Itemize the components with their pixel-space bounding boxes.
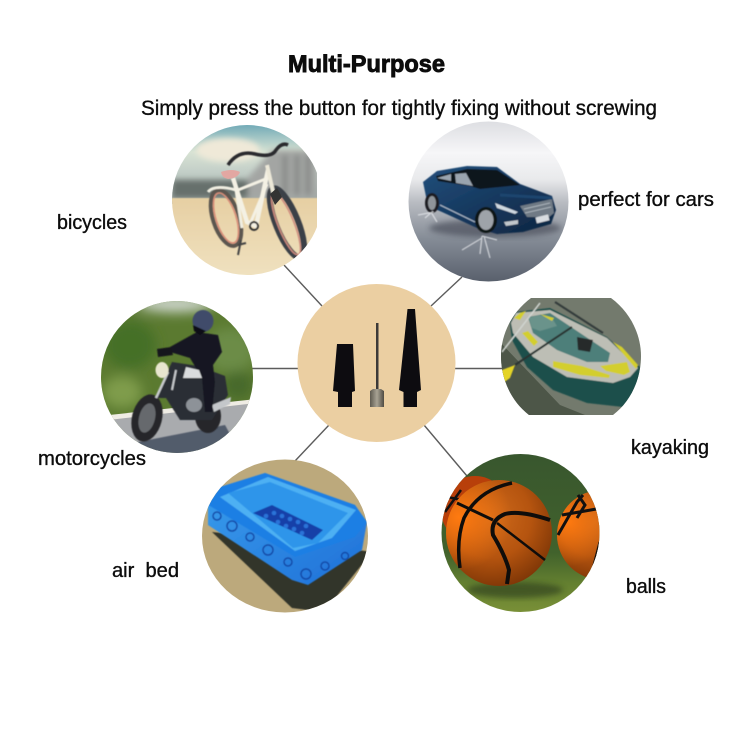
icon: inflation needle [370,323,384,407]
label: motorcycles: motorcycles [38,447,146,470]
label: perfect for cars: perfect for cars [578,188,714,211]
photo: car [405,120,573,284]
photo: inflatable boat [498,295,644,417]
connector lines [250,265,503,476]
subtitle: Simply press the button for tightly fixing without screwing [141,97,657,120]
label: bicycles: bicycles [57,211,127,234]
photo: bicycle [170,124,320,278]
title: Multi-Purpose [288,51,445,78]
label: balls: balls [626,575,666,598]
icon: long nozzle [399,309,421,407]
hub circle [298,284,456,442]
photo: basketballs [442,454,600,612]
label: kayaking: kayaking [631,436,709,459]
label: air bed: air bed [112,559,179,582]
photo: motorcycle [98,296,256,458]
central hub: nozzle adapters [298,284,456,442]
photo: inflatable pool [198,456,372,616]
icon: tapered nozzle [333,344,355,407]
